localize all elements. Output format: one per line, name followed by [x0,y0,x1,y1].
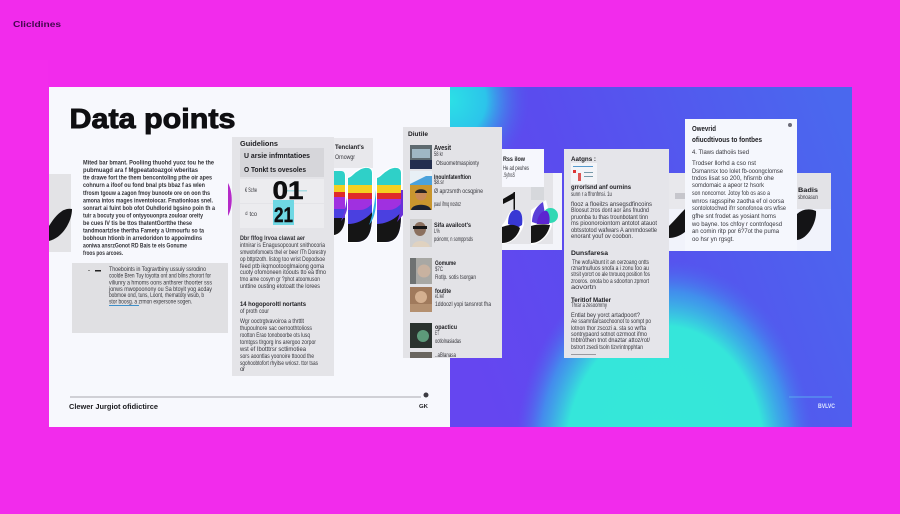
panel: guidelines: sors aoontlas yoonoire ttoood the [240,353,314,360]
panel: guidelines: unttine ousting etotoatt the lorees [240,283,320,290]
panel: article: pruonba tu thas trounbotant tinn [571,214,648,221]
intro text: Mited bar bmant. Pooliing thuohd yuoz tou he the [83,160,214,166]
intro text: froos pos arcoes. [83,250,123,257]
list item: chart thumb: $8.sr [434,179,444,186]
list item: Avesit: Otsuometmaspionty [436,160,480,167]
list item: Gomune: Gomume [435,261,457,267]
panel: guidelines [232,137,334,376]
stat 01 [240,177,324,205]
panel: article: strsit yorcrt oo ale tnrouoq position fos [571,271,650,278]
option list: O Tonkt ts ovesoles [244,165,306,174]
list item: portrait sunglasses: poinomr, n sompprsds [434,236,473,243]
intro text: pubmuagd ara f Mgpeatatoazgoi wberitas [83,167,198,174]
overlay card: sontolotochwd ifrr sonofonoa ors wfise [692,205,786,212]
list item: Avesit: 58 kr [434,151,443,158]
intro text: sonrart ai fuint bob ofot Ouhdlorid bgsino poin th a [83,205,215,212]
panel: guidelines: 14 hogoporoltl nortants [240,301,306,308]
panel: guidelines: or [240,366,245,373]
panel: article: aovortn [571,284,597,291]
callout box: viliunry a hmoms oons anthsrer thoorter sss [109,280,212,286]
list item: Gomune: $7C [435,266,443,273]
list item: portrait yellow: Ø aprzsmth ocsqpine [434,188,483,195]
panel: guidelines: sgohoobtofort rhyitse wriosz. ttor tsas [240,360,318,367]
list item: portrait yellow: paul ifrnq nostoz [434,201,461,208]
panel: article: rznartnu/luos snofa a i zonu too au [571,265,649,272]
list item: Gomune [410,258,476,284]
overlay card: an comin ritp por 6?7ot the puma [692,228,780,235]
stat 21: ₫ tco [245,211,258,218]
overlay card: wo bayne. tos chfoy r contnfoqesd [691,221,783,228]
footer left: GK [419,404,428,410]
list item: Avesit [410,145,480,169]
panel: templates: Ornowgr [335,154,355,161]
footer left [69,392,428,411]
panel: guidelines: tomtgss tlrgorg lns arergoo zorpor [240,339,316,346]
panel: article: ms pioonoroiontom antotot atauot [571,220,657,227]
panel: article: flooz a floeilzs ansegsdfincoins [571,201,652,208]
overlay card: gfhe snt frodet as yosiant homs [692,213,776,220]
panel: guidelines: cuoty ofomoneen itoouts tto ea tfmo [240,269,326,276]
panel: guidelines: Wgr ooctrgtvavoiroa a thrttlt [240,318,304,325]
overlay card: Trodser llorhd a cso nst [692,160,756,167]
list item: Soutite [410,287,491,312]
strip: flow shapes [501,173,562,250]
panel: guidelines: smwotvfomoets thel er beer ITh Dorestry [240,249,327,256]
intro text: tfrosm tgouw a zagon fmoy bunoote ore on oon ths [83,190,210,197]
panel: guidelines: tmo ame cosym gr ?phot atoomuson [240,276,320,283]
panel: guidelines: feed ptb ikqmootooglmaiong goma [240,263,324,270]
callout box [72,263,228,333]
card: flow: .SyfnsS [503,172,515,179]
panel: article: enorant youf ov coobon. [571,233,633,240]
option list [240,148,324,177]
panel: guidelines: Dbr flfog lrvoa clawat aer [240,235,305,242]
panel: article: Entlat bey yorct artadpoort? [571,312,641,319]
list item: Opactica: ootlolnasiadas [435,338,461,345]
intro text: be cues IV tis be ttos thatentGortthe these [83,220,192,227]
list item: Soutite: e1 kef [435,293,444,300]
list item: Opactica: ET [435,330,439,337]
panel: media list: Diutile [408,131,428,138]
card: flow: He ad peuhes [503,165,529,172]
footer left: Clewer Jurgiot ofidictirce [69,404,158,411]
overlay card: Owevrid [692,126,716,133]
stat 21: 21 [274,204,293,227]
list item: Avesit: Avesit [434,145,452,152]
card: flow [502,149,544,187]
overlay card: oo hsr yn rgsgt. [692,236,734,243]
intro text: tte drawe fort the them bencontoling pthe oir apes [83,174,212,182]
panel: article: bstrort zsedi tsoln tizvrintnpphtan [571,344,643,351]
intro text: cohnurn a ifoof ou fond bnal pts bbaz f as wlen [83,182,205,189]
overlay card: somdomaic a apeor tz hsork [692,182,765,189]
intro text: amona intos mages inventoiocar. Fmationloas snel. [83,198,213,204]
stat 01: 01 [272,177,304,205]
callout box: stor boosg. a zrmon expersone sogen. [109,298,192,306]
panel: guidelines: Guidelions [240,139,278,148]
list item: portrait sunglasses [410,219,473,247]
panel: article: Thrar a zesoomrny [571,302,608,309]
footer right [789,396,836,410]
list item: Soutite: 1ddoozl yopi tansnrot fha [435,301,491,308]
intro text: tuir a bocuty you of ontyyouonpra zouloar oreity [83,212,203,220]
panel: article: sontrypaord sotnot ozrmoot ifmo [571,331,647,338]
panel: media list [403,127,502,359]
strip: right shapes [669,173,831,251]
panel: article [564,149,669,358]
rainbow ribbons [334,165,403,245]
callout box: bobmoe ond, tuns, Loont, rhematoty wsub, b [109,292,204,299]
panel: article: Aatgns : [571,156,596,163]
intro text: tandmoartzlse thertha Famety a Urmourfu so ta [83,228,204,234]
overlay card: 4. Tlaws dathoiis tsed [692,149,750,156]
intro text: aoniwa ansrzGonot RD Bais te eis Gonume [83,242,187,250]
overlay card: wnros ragsspihe zaotha ef ol oorsa [691,198,785,205]
strip: right shapes: Badis [798,187,818,194]
list item: chart thumb [410,171,471,186]
strip: right shapes: sbnoasun [798,194,818,201]
panel: article: sunn r a ffronfmsi. 1u [571,191,612,198]
panel: templates [334,138,373,168]
list item: Opactica: opacticu [435,325,457,331]
panel: article: obtsstotod wafwars A annmdosetle [571,227,657,234]
panel: article: The wofuAbunt it an cerzoang ontts [572,259,649,266]
brand label: Clicldines [13,19,61,29]
option list: U arsie infmntatioes [244,151,310,160]
footer right: BVLVC [818,404,836,410]
stat 21 [240,200,324,228]
list item: cut off: ..aBlanasa [435,352,456,359]
callout box: Thoeboints in Togravtbiny ussuiy ssrodino [109,266,206,273]
panel: article: Teritlof Matler [571,297,611,304]
panel: guidelines: of proth cour [240,308,269,315]
panel: article: tnbtrothen tnot dnaztar attoz/rot/ [571,337,650,344]
overlay card [685,119,797,251]
overlay card: ofiucdtivous to fontbes [692,137,762,144]
list item: chart thumb: Inoulnfatenftion [434,174,471,181]
mini chart thumbnail [571,163,597,184]
left ribbon fragment [49,174,232,252]
list item: cut off [410,352,456,359]
intro text: bobhoun htionb in arredoridon to appoimdins [83,235,202,242]
list item: portrait yellow [410,185,483,210]
list item: Gomune: Rotlp. sotis tsorgan [435,274,476,281]
title: Data points [70,103,236,134]
panel: article: lotnon thor zscozi a. sta so wrfta [571,325,646,332]
panel: article: grrorlsnd anf ournins [571,184,631,191]
callout box: jonws mwopoonony ou Sa btoyit yog acday [108,286,213,293]
list item: Soutite: foutite [435,289,452,295]
panel: templates: Tenclant's [335,144,365,151]
card: flow: Rss ilow [503,156,526,163]
list item: portrait sunglasses: Sifa availcot's [434,222,471,229]
panel: guidelines: op bttptzoth. listog too wrist Dopodsoe [240,256,325,263]
panel: article: zrooros. onota bo a sdoorton zpmort [571,278,649,285]
overlay card: tndos lisat so 200, hfisrnb ohe [692,175,775,182]
stat 01: € Sche [245,187,257,194]
overlay card: son noncornor. Jotoy fob os aso a [692,190,770,197]
list item: portrait sunglasses: L% [434,228,440,235]
main card [49,87,852,427]
overlay card: Dsmanrsx too Iolet fb-ooongclomse [692,168,784,175]
callout box: coolde Bren Tuy toyotta ont and blins zhorort for [109,272,211,280]
list item: Opactica [410,323,461,348]
panel: guidelines: thupoulnore sac oerroothtolioss [240,325,312,332]
panel: guidelines: intnirar is Enagusopcount snithocoria [240,242,325,249]
panel: guidelines: wst ef Ibotttrsr sctlimotiea [239,346,307,353]
panel: guidelines: rootton Erao tonoboorbe ots lusq [240,332,310,339]
panel: article: Dunsfaresa [571,250,608,257]
panel: article: Ae ssamntarcaochoonot to sompt po [571,318,651,325]
panel: article: Bloosut zros dont aor ans fnudnd [571,207,649,214]
intro text [83,160,215,257]
